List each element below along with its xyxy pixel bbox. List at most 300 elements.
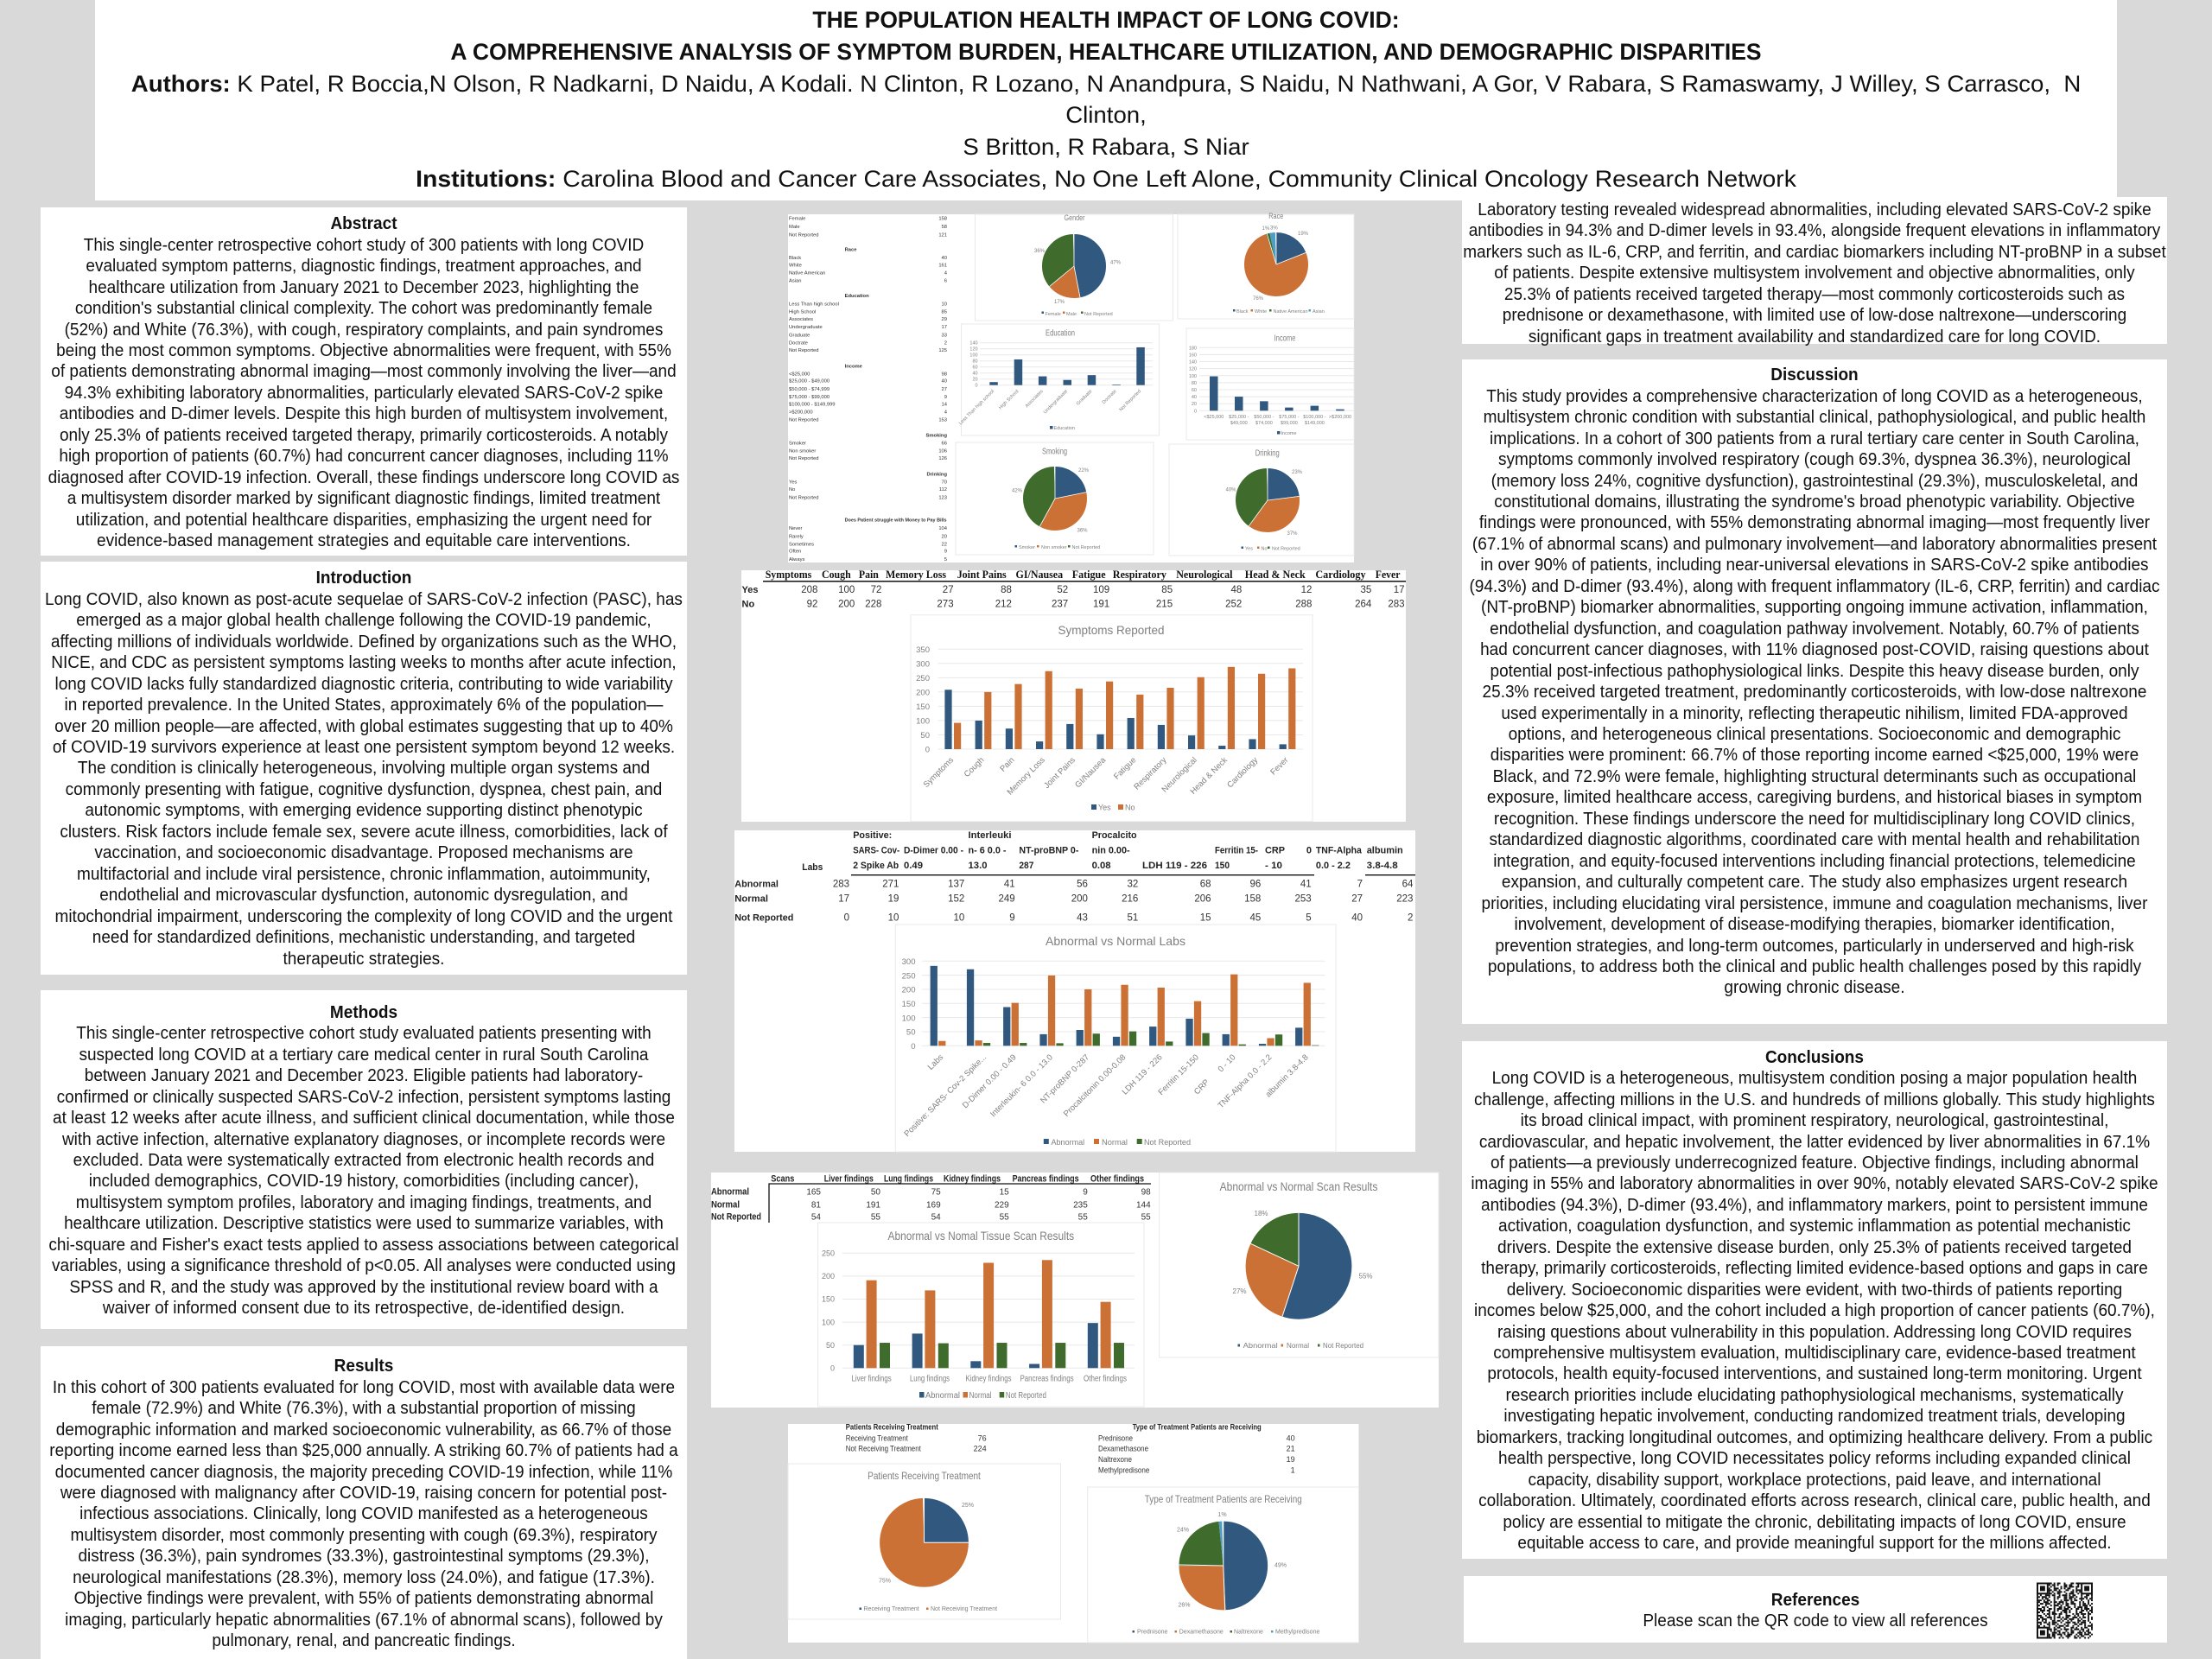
text: discussion body: 25.3% received targeted treatment, predominantly corticosteroids, with low-dose naltrexone [1483,683,2146,702]
table: labs: 19 [888,893,899,904]
text: results body: neurological manifestations (28.3%), memory loss (24.0%), and fatigue (17.3%). [73,1568,655,1587]
table: symptoms: 100 [838,585,855,595]
table: symptoms: 48 [1231,585,1242,595]
chart: abnormal vs normal labs bars: LDH 119 - 226 [1121,1052,1165,1096]
chart: smoking pie: Non smoker [1041,545,1067,550]
chart: smoking pie: 42% [1012,489,1023,494]
table: scans: 54 [931,1213,941,1223]
chart: abnormal vs normal labs bars: 250 [902,971,916,981]
chart: abnormal vs normal scan results pie: 18% [1255,1210,1268,1217]
text: methods body: variables, using a significance threshold of p<0.05. All analyses were conducted using [52,1256,676,1275]
text: discussion body: potential post-infectious pathophysiological links. Despite this heavy disease burden, only [1491,662,2139,681]
table: symptoms: 208 [801,585,817,595]
text: discussion body: options, and heterogeneous clinical presentations. Socioeconomic and demographic [1509,725,2120,744]
chart: drinking pie: 37% [1287,531,1298,537]
text: results body [49,1378,678,1650]
chart: abnormal vs normal labs bars: 150 [902,1000,916,1009]
chart: type of treatment pie: 26% [1179,1602,1191,1609]
table: symptoms: 200 [838,600,855,610]
text: results body: reporting income earned less than $25,000 annually. A striking 60.7% of patients had a [49,1441,678,1460]
table: demographics: 4 [944,271,948,276]
table: symptoms: 85 [1161,585,1173,595]
text: introduction body: Long COVID, also known as post-acute sequelae of SARS-CoV-2 infection (PASC), has [45,590,683,609]
chart: income bars: $25,000 - [1229,415,1249,420]
text: introduction body: The condition is clinically heterogeneous, involving multiple organ systems and [78,759,650,778]
chart: income bars: 0 [1194,409,1197,414]
text: discussion body: recognition. These findings underscore the need for multidisciplinary long COVID clinics, [1494,810,2135,829]
table: demographics: 27 [942,387,947,392]
table: demographics: Education [845,294,869,299]
table: type of treatment: Prednisone [1098,1434,1133,1443]
title: THE POPULATION HEALTH IMPACT OF LONG COVID: [812,7,1400,33]
text: conclusions body: antibodies (94.3%), D-dimer (93.4%), and inflammatory markers, point to persistent immune [1481,1196,2148,1215]
text: introduction body [45,590,683,969]
text: discussion body: This study provides a comprehensive characterization of long COVID as a heterogeneous, [1486,387,2143,406]
table: demographics: High School [789,310,816,315]
panel: symptoms [741,568,1406,822]
table: symptoms: Symptoms [766,568,811,581]
table: demographics: 153 [938,418,947,423]
chart: abnormal vs normal tissue scan bars: 150 [822,1295,835,1304]
text: discussion body: findings were pronounced, with 55% demonstrating abnormal imaging—most frequently liver [1479,513,2150,532]
table: labs: 158 [1244,893,1261,904]
table: type of treatment: Naltrexone [1098,1455,1132,1464]
table: labs: 41 [1300,879,1312,889]
table: scans: 235 [1073,1200,1088,1210]
table: demographics: Native American [789,271,825,276]
text: discussion body: expansion, and culturally competent care. The study also emphasizes urgent research [1502,873,2127,892]
heading: discussion: Discussion [1770,365,1859,385]
chart: abnormal vs normal labs bars: Positive: SARS- Cov-2 Spike... [902,1052,988,1139]
text: conclusions body: of patients—a previously underrecognized feature. Objective findings, including abnormal [1491,1154,2139,1173]
text: results continued body: prednisone or dexamethasone, with limited use of low-dose naltrexone—underscoring [1503,306,2126,325]
table: demographics: 9 [944,395,947,400]
text: conclusions body: therapy, primarily corticosteroids, reflecting limited evidence-based options and gaps in care [1481,1259,2148,1278]
table: demographics: Does Patient struggle with Money to Pay Bills [845,518,947,524]
table: symptoms: 12 [1301,585,1312,595]
text: abstract body: a multisystem disorder marked by significant diagnostic findings, limited treatment [67,489,660,508]
chart: income bars: 40 [1192,395,1197,400]
chart: drinking pie: No [1262,546,1268,551]
text: methods body: included demographics, COVID-19 history, comorbidities (including cancer), [89,1172,639,1191]
heading: conclusions: Conclusions [1765,1048,1864,1067]
table: symptoms: 35 [1361,585,1371,595]
table: symptoms: No [741,600,754,610]
text: methods body: between January 2021 and December 2023. Eligible patients had laboratory- [85,1066,643,1085]
table: labs: 283 [833,879,849,889]
table: labs: 45 [1250,913,1261,924]
table: demographics: 4 [944,410,948,416]
chart: education bars: High School [998,389,1020,410]
table: labs: 96 [1250,879,1261,889]
table: labs: 40 [1351,913,1363,924]
table: symptoms: 228 [865,600,881,610]
text: results continued body: antibodies in 94.3% and D-dimer levels in 93.4%, alongside frequent elevations in inflammatory [1469,221,2160,240]
text: results body: infectious associations. Clinically, long COVID manifested as a heterogeneous [79,1504,648,1523]
table: labs: 0.0 - 2.2 [1316,861,1351,871]
table: demographics: 40 [942,256,947,261]
table: scans: 55 [1000,1213,1009,1223]
table: labs: 43 [1077,913,1088,924]
text: conclusions body [1471,1069,2158,1553]
table: labs: 271 [882,879,899,889]
text: discussion body: standardized diagnostic algorithms, coordinated care with mental health and rehabilitation [1489,830,2140,849]
text: abstract body: evaluated symptom patterns, diagnostic findings, treatment approaches, and [86,257,642,276]
text: discussion body: involvement, development of disease-modifying therapies, biomarker identification, [1515,915,2114,934]
table: symptoms: 109 [1093,585,1109,595]
table: demographics: 17 [942,325,947,330]
table: demographics: Smoker [789,442,806,447]
text: abstract body [48,236,679,550]
text: discussion body: (94.3%) and D-dimer (93.4%), along with frequent inflammatory (IL-6, CRP, ferritin) and cardiac [1469,577,2160,596]
text: introduction body: affecting millions of individuals worldwide. Defined by organizations such as the WHO, [51,632,677,652]
table: labs: - 10 [1265,861,1282,871]
panel: results continued [1462,197,2167,344]
table: demographics: 10 [942,302,947,307]
chart: abnormal vs normal tissue scan bars: Abnormal vs Nomal Tissue Scan Results [888,1229,1074,1243]
table: symptoms: 27 [943,585,954,595]
chart: symptoms reported bars: Joint Pains [1042,755,1077,791]
text: conclusions body: policy are essential to mitigate the chronic, debilitating impacts of long COVID, ensure [1503,1513,2126,1532]
table: demographics: 98 [942,372,947,377]
text: discussion body: integration, and equity-focused interventions including financial protections, telemedicine [1493,852,2136,871]
table: scans: Scans [771,1173,794,1184]
chart: type of treatment pie: 1% [1218,1512,1227,1518]
chart: drinking pie: Not Reported [1272,546,1300,551]
table: patients receiving treatment: Receiving Treatment [846,1434,908,1443]
chart: income bars: 160 [1189,353,1197,358]
heading: introduction: Introduction [316,569,411,588]
chart: abnormal vs normal tissue scan bars: Not Reported [1006,1391,1046,1401]
table: demographics: 70 [942,480,947,486]
chart: abnormal vs normal labs bars: Ferritin 15-150 [1156,1052,1201,1097]
text: introduction body: need for standardized definitions, mechanistic understanding, and targeted [92,928,635,947]
title: A COMPREHENSIVE ANALYSIS OF SYMPTOM BURDEN, HEALTHCARE UTILIZATION, AND DEMOGRAPHIC DISPARITIES [450,39,1762,65]
table: demographics: 123 [938,495,947,500]
table: demographics: Non smoker [789,449,816,454]
chart: symptoms reported bars: Pain [998,755,1017,774]
text: results body: demographic information and marked socioeconomic vulnerability, as 66.7% of those [56,1421,671,1440]
text: introduction body: autonomic symptoms, with emerging evidence supporting distinct phenotypic [85,801,643,820]
panel: demographics [788,212,1354,563]
panel: scans [711,1173,1439,1408]
table: demographics: Female [789,217,805,222]
chart: race pie: Native American [1274,309,1308,315]
table: labs: 150 [1215,861,1230,871]
chart: symptoms reported bars: 150 [916,702,930,712]
table: demographics: $100,000 - $149,999 [789,402,836,407]
chart: education bars: Graduate [1076,389,1093,407]
table: symptoms: 237 [1052,600,1068,610]
chart: symptoms reported bars [911,615,1313,822]
table: labs: 17 [838,893,849,904]
chart: type of treatment pie: Methylpredisone [1275,1630,1319,1635]
chart: income bars: $74,000 [1255,421,1273,426]
table: demographics: >$200,000 [789,410,813,416]
text: results body: were diagnosed with malignancy after COVID-19, raising concern for potential post- [60,1484,667,1503]
table: symptoms: 264 [1355,600,1372,610]
table: symptoms: Yes [741,585,758,595]
chart: race pie: 19% [1298,232,1309,237]
chart: income bars: $50,000 - [1254,415,1274,420]
text: results continued body: of patients. Despite extensive multisystem involvement and objective abnormalities, only [1494,264,2135,283]
chart: smoking pie: 36% [1077,529,1088,534]
table: scans: Kidney findings [944,1173,1001,1184]
text: abstract body: high proportion of patients (60.7%) had concurrent cancer diagnoses, including 11% [59,447,669,466]
chart: abnormal vs normal tissue scan bars: 200 [822,1272,835,1281]
chart: income bars: 180 [1189,346,1197,351]
chart: education bars: 20 [972,378,978,383]
table: labs: 51 [1128,913,1138,924]
table: labs [734,830,1415,924]
text: results body: multisystem disorder, most commonly presenting with cough (69.3%), respiratory [70,1526,657,1545]
table: scans: Abnormal [711,1186,749,1197]
chart: patients receiving treatment pie: 25% [962,1503,974,1509]
table: labs: 15 [1200,913,1211,924]
chart: symptoms reported bars: GI/Nausea [1073,755,1109,790]
table: labs: 152 [948,893,964,904]
table: labs: Labs [802,862,823,873]
table: symptoms: 212 [995,600,1012,610]
text: discussion body: constitutional domains, illustrating the syndrome's broad phenotypic variability. Objective [1494,493,2135,512]
table: demographics: 20 [942,534,947,539]
chart: education bars: 140 [969,341,978,346]
text: discussion body: multisystem chronic condition with substantial clinical, pathophysiological, and public health [1484,408,2145,427]
table: labs: D-Dimer 0.00 - [904,845,963,855]
table: demographics: Undergraduate [789,325,823,330]
table: symptoms: 215 [1156,600,1173,610]
table: demographics: 29 [942,317,947,322]
chart: income bars: 100 [1189,374,1197,379]
text: introduction body: vaccination, and socioeconomic disadvantage. Proposed mechanisms are [94,843,633,862]
table: labs: 200 [1071,893,1088,904]
chart: abnormal vs normal labs bars: 0 - 10 [1217,1052,1238,1074]
table: demographics: 66 [942,442,947,447]
text: abstract body: of patients demonstrating abnormal imaging—most commonly involving the liver—and [51,362,677,381]
text: introduction body: therapeutic strategies. [283,950,444,969]
text: methods body [48,1024,679,1318]
chart: smoking pie: Smoking [1042,448,1067,456]
chart: abnormal vs normal tissue scan bars: Other findings [1084,1374,1127,1384]
chart: symptoms reported bars: Neurological [1160,755,1199,794]
text: conclusions body: incomes below $25,000, and the cohort included a high proportion of cancer patients (60.7%), [1474,1301,2155,1320]
table: symptoms: 283 [1388,600,1405,610]
table: labs: albumin [1367,845,1403,855]
text: results continued body: Laboratory testing revealed widespread abnormalities, including elevated SARS-CoV-2 spike [1478,200,2152,219]
chart: abnormal vs normal labs bars: D-Dimer 0.00 - 0.49 [961,1052,1019,1110]
table: type of treatment: 21 [1287,1445,1295,1453]
table: type of treatment: 19 [1287,1455,1295,1464]
table: labs: 10 [888,913,899,924]
table: patients receiving treatment: Not Receiving Treatment [846,1445,921,1453]
chart: income bars: Income [1274,334,1296,344]
chart: abnormal vs normal tissue scan bars: Pancreas findings [1020,1374,1074,1384]
chart: education bars: 80 [972,359,978,365]
chart: gender pie: Female [1046,312,1061,317]
chart: income bars: $100,000 - [1303,415,1326,420]
table: demographics: $50,000 - $74,999 [789,387,830,392]
chart: patients receiving treatment pie: Not Receiving Treatment [931,1606,997,1612]
table: demographics: 126 [938,456,947,461]
table: scans: 169 [926,1200,941,1210]
table: demographics: Less Than high school [789,302,839,307]
chart: symptoms reported bars: Cardiology [1225,755,1260,790]
chart: education bars: 60 [972,365,978,371]
table: symptoms: Neurological [1176,568,1233,581]
table: type of treatment [1098,1422,1295,1474]
table: symptoms: Head & Neck [1245,568,1306,581]
table: labs: 56 [1077,879,1088,889]
table: labs: 9 [1009,913,1015,924]
text: methods body: healthcare utilization. Descriptive statistics were used to summarize variables, with [64,1214,664,1233]
chart: income bars: 120 [1189,367,1197,372]
chart: income bars: >$200,000 [1329,415,1351,420]
chart: symptoms reported bars: Fatigue [1112,755,1138,782]
chart: abnormal vs normal tissue scan bars: 0 [830,1363,835,1372]
table: symptoms: GI/Nausea [1016,568,1064,581]
table: labs: 253 [1295,893,1312,904]
chart: abnormal vs normal labs bars: 300 [902,957,916,967]
table: symptoms: 252 [1225,600,1242,610]
chart: abnormal vs normal labs bars: Not Reported [1144,1138,1191,1147]
panel: abstract [41,207,687,556]
text: abstract body: antibodies and D-dimer levels. Despite this high burden of multisystem involvement, [60,404,668,423]
heading: results: Results [334,1357,393,1376]
text: conclusions body: drivers. Despite the extensive disease burden, only 25.3% of patients received targeted [1497,1238,2132,1257]
chart: abnormal vs normal tissue scan bars [818,1223,1144,1407]
chart: education bars: Education [1054,426,1075,431]
chart: education bars: 120 [969,347,978,353]
table: patients receiving treatment [846,1422,987,1453]
text: introduction body: commonly presenting with fatigue, cognitive dysfunction, dyspnea, chest pain, and [66,780,662,799]
table: labs: TNF-Alpha [1316,845,1363,855]
chart: smoking pie: Smoker [1019,545,1035,550]
panel: results [41,1346,687,1659]
heading: methods: Methods [330,1003,397,1022]
chart: type of treatment pie: Prednisone [1137,1630,1168,1635]
text: results body: Objective findings were prevalent, with 55% of patients demonstrating abnormal [74,1589,653,1608]
chart: gender pie: Not Reported [1084,312,1113,317]
authors: S Britton, R Rabara, S Niar [963,134,1249,160]
table: labs: nin 0.00- [1092,845,1130,855]
chart: type of treatment pie [1088,1487,1358,1643]
table: labs: 216 [1122,893,1138,904]
chart: gender pie: Gender [1065,213,1085,223]
table: labs: 3.8-4.8 [1367,861,1398,871]
text: abstract body: This single-center retrospective cohort study of 300 patients with long COVID [84,236,644,255]
table: scans: 55 [1141,1213,1151,1223]
text: discussion body: (memory loss 24%, cognitive dysfunction), gastrointestinal (29.3%), musculoskeletal, and [1491,472,2138,491]
chart: symptoms reported bars: 100 [916,717,930,726]
chart: abnormal vs normal labs bars: Abnormal vs Normal Labs [1046,934,1185,948]
panel: discussion [1462,359,2167,1024]
text: conclusions body: research priorities include elucidating pathophysiological mechanisms, systematically [1505,1386,2123,1405]
table: labs: Normal [734,893,768,904]
text: discussion body: prevention strategies, and long-term outcomes, particularly in underserved and high-risk [1495,937,2134,956]
chart: education bars: 0 [976,384,978,389]
table: demographics: Always [789,557,804,563]
chart: abnormal vs normal scan results pie: Abnormal [1243,1341,1278,1350]
table: demographics: Rarely [789,534,804,539]
table: symptoms: Fatigue [1072,568,1106,581]
chart: symptoms reported bars: Memory Loss [1006,755,1047,797]
text: discussion body: symptoms commonly involved respiratory (cough 69.3%, dyspnea 36.3%), neurological [1498,450,2131,469]
chart: education bars: 100 [969,353,978,359]
table: type of treatment: Dexamethasone [1098,1445,1148,1453]
chart: smoking pie [956,442,1154,555]
text: conclusions body: Long COVID is a heterogeneous, multisystem condition posing a major population health [1492,1069,2137,1088]
text: discussion body: (67.1% of abnormal scans) and pulmonary involvement—and laboratory abnormalities present [1472,535,2157,554]
text: discussion body: had concurrent cancer diagnoses, with 11% diagnosed post-COVID, raising questions about [1480,640,2149,659]
chart: income bars [1186,328,1354,440]
text: discussion body: (NT-proBNP) biomarker abnormalities, supporting ongoing immune activation, inflammation, [1481,598,2148,617]
text: conclusions body: activation, coagulation dysfunction, and systemic inflammation as potential mechanistic [1498,1217,2131,1236]
chart: abnormal vs normal labs bars: 50 [906,1028,916,1038]
table: scans: Liver findings [824,1173,874,1184]
table: symptoms: Cardiology [1315,568,1366,581]
table: demographics: 121 [938,232,947,238]
table: labs: 2 [1408,913,1413,924]
title [450,7,1762,65]
text: results body: pulmonary, renal, and pancreatic findings. [212,1631,516,1650]
chart: patients receiving treatment pie: Receiving Treatment [864,1606,919,1612]
table: type of treatment: 40 [1287,1434,1295,1443]
chart: income bars: 140 [1189,359,1197,365]
table: labs: 0.49 [904,861,923,871]
text: introduction body: over 20 million people—are affected, with global estimates suggesting that up to 40% [54,717,673,736]
chart: gender pie: 36% [1034,249,1046,254]
chart: abnormal vs normal labs bars: 0 [911,1042,916,1052]
chart: abnormal vs normal labs bars [895,925,1336,1152]
table: demographics: 125 [938,348,947,353]
heading: abstract: Abstract [330,214,397,233]
table: scans: 54 [811,1213,821,1223]
table: demographics: 22 [942,542,947,547]
text: introduction body: multifactorial and include viral persistence, chronic inflammation, autoimmunity, [77,865,651,884]
table: labs: 137 [948,879,964,889]
table: labs: 68 [1200,879,1211,889]
table: demographics: 14 [942,402,948,407]
chart: education bars: Less Than high school [958,389,995,426]
table: labs: 41 [1004,879,1015,889]
table: demographics: 9 [944,550,947,555]
chart: abnormal vs normal tissue scan bars: Lung findings [910,1374,950,1384]
authors: Authors: K Patel, R Boccia,N Olson, R Nadkarni, D Naidu, A Kodali. N Clinton, R Lozano, N Anandpura, S Naidu, N Nathwani, A Gor, V Rabara, S Ramaswamy, J Willey, S Carrasco, N [131,71,2081,97]
text: abstract body: utilization, and potential healthcare disparities, emphasizing the urgent need for [76,511,652,530]
chart: gender pie: 47% [1110,261,1122,266]
text: results body: In this cohort of 300 patients evaluated for long COVID, most with available data were [53,1378,675,1397]
table: demographics: $75,000 - $99,000 [789,395,830,400]
table: demographics: Not Reported [789,495,818,500]
table: demographics: 58 [942,225,947,230]
table: labs: SARS- Cov- [853,845,899,855]
table: symptoms: 92 [807,600,817,610]
chart: abnormal vs normal scan results pie: Abnormal vs Normal Scan Results [1220,1179,1377,1193]
table: labs: Positive: [853,830,892,841]
chart: abnormal vs normal scan results pie: Not Reported [1323,1341,1363,1350]
table: demographics: Not Reported [789,456,818,461]
table: demographics: Male [789,225,800,230]
chart: race pie: Asian [1313,309,1325,315]
text: conclusions body: comprehensive multisystem evaluation, multidisciplinary care, evidence-based treatment [1493,1344,2136,1363]
chart: abnormal vs normal labs bars: TNF-Alpha 0.0 - 2.2 [1217,1052,1274,1110]
text: methods body: chi-square and Fisher's exact tests applied to assess associations between categorical [48,1236,679,1255]
chart: race pie: 1% [1262,226,1270,232]
text: methods body: This single-center retrospective cohort study evaluated patients presenting with [76,1024,652,1043]
table: symptoms: 52 [1057,585,1068,595]
text: introduction body: of COVID-19 survivors experience at least one persistent symptom beyond 12 weeks. [53,738,675,757]
chart: abnormal vs normal labs bars: Procalcitonin 0.00-0.08 [1062,1052,1128,1119]
